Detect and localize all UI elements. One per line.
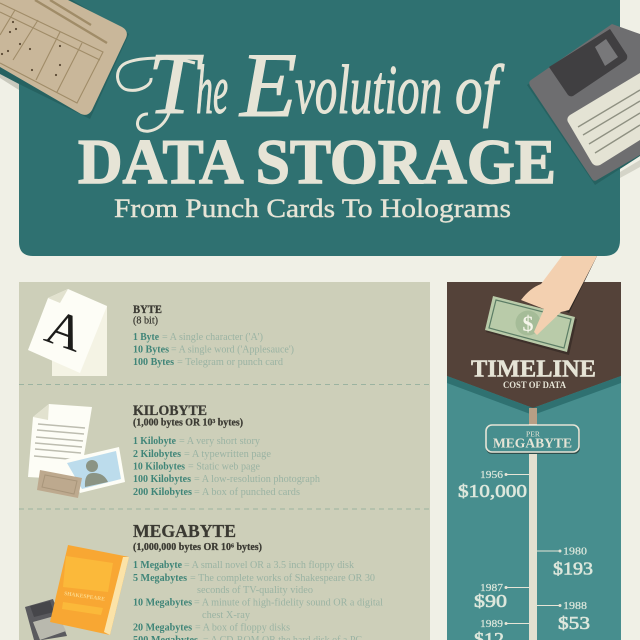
section: kilobyte: (1,000 bytes OR 10³ bytes) (133, 418, 243, 428)
timeline entry: 1980: $193 (553, 558, 593, 578)
section: kilobyte: 100 Kilobytes (133, 474, 191, 485)
section: megabyte: (1,000,000 bytes OR 10⁶ bytes) (133, 542, 262, 553)
label: per megabyte: PER (526, 430, 540, 438)
heading: timeline: TIMELINE (471, 356, 596, 382)
timeline entry: 1956: $10,000 (458, 481, 527, 501)
section: kilobyte: 2 Kilobytes (133, 449, 181, 460)
icon: letter A paper (28, 289, 107, 376)
timeline entry: 1987 (474, 582, 529, 611)
icon: small floppy disk (25, 599, 67, 640)
icon: paper, photo and card (28, 404, 125, 498)
title: The Evolution of: he (196, 52, 228, 129)
icon: hand holding banknote (485, 256, 597, 355)
section: megabyte (133, 521, 383, 640)
panel: data units (19, 282, 430, 640)
section: megabyte: 1 Megabyte (133, 560, 182, 571)
section: kilobyte: 200 Kilobytes (133, 487, 192, 498)
section: byte (133, 304, 294, 368)
section: byte: BYTE (133, 304, 162, 316)
section: byte: = Telegram or punch card (177, 357, 284, 368)
icon: punch card (0, 0, 129, 119)
panel: timeline (447, 256, 621, 640)
timeline entry: 1980: 1980 (563, 546, 588, 558)
icon: hand holding banknote: $ (522, 311, 534, 336)
section: kilobyte (133, 403, 321, 498)
section: megabyte: MEGABYTE (133, 521, 236, 541)
timeline entry: 1956: 1956 (480, 469, 504, 481)
section: megabyte: 5 Megabytes (133, 573, 187, 584)
label: per megabyte (486, 425, 580, 454)
section: kilobyte: = A typewritten page (184, 449, 271, 460)
timeline entry: 1980 (537, 546, 593, 578)
title: DATA STORAGE: DATA STORAGE (78, 127, 556, 197)
section: megabyte: = A minute of high-fidelity sound OR a digital (194, 598, 383, 608)
timeline entry: 1987: 1987 (480, 582, 504, 594)
section: kilobyte: = Static web page (188, 462, 260, 472)
icon: floppy disk (527, 24, 640, 185)
section: kilobyte: 10 Kilobytes (133, 462, 185, 472)
header banner (19, 0, 620, 256)
section: byte: = A single character ('A') (162, 332, 263, 343)
timeline entry: 1987: $90 (474, 591, 507, 611)
section: byte: (8 bit) (133, 316, 158, 326)
section: megabyte: 10 Megabytes (133, 598, 192, 608)
section: byte: = A single word ('Applesauce') (171, 344, 294, 356)
title: The Evolution of: E (238, 34, 297, 136)
timeline entry: 1988: $53 (558, 613, 590, 633)
title: The Evolution of: of (455, 52, 505, 129)
timeline entry: 1989: 1989 (480, 618, 504, 630)
icon: letter A paper: A (39, 298, 92, 363)
label: per megabyte: MEGABYTE (493, 436, 572, 450)
section: megabyte: = The complete works of Shakespeare OR 30 (190, 573, 375, 584)
timeline entry: 1988: 1988 (563, 600, 588, 612)
section: kilobyte: = A box of punched cards (194, 487, 300, 498)
icon: Shakespeare book: SHAKESPEARE (64, 591, 105, 603)
title: The Evolution of (118, 34, 505, 136)
title: The Evolution of: volution (295, 52, 442, 129)
subheading: cost of data: COST OF DATA (503, 380, 566, 390)
section: megabyte: seconds of TV-quality video (197, 585, 313, 596)
section: byte: 10 Bytes (133, 344, 169, 356)
section: kilobyte: = A very short story (179, 436, 261, 447)
section: megabyte: = A small novel OR a 3.5 inch floppy disk (184, 560, 355, 571)
subtitle: From Punch Cards To Holograms (114, 194, 511, 223)
section: byte: 100 Bytes (133, 357, 174, 368)
timeline entry: 1988 (537, 600, 590, 633)
section: megabyte: 20 Megabytes (133, 622, 192, 634)
section: kilobyte: = A low-resolution photograph (194, 474, 321, 485)
section: kilobyte: 1 Kilobyte (133, 436, 176, 447)
timeline entry: 1989 (474, 618, 529, 640)
section: kilobyte: KILOBYTE (133, 403, 207, 419)
section: megabyte: chest X-ray (202, 610, 251, 621)
section: byte: 1 Byte (133, 332, 159, 343)
timeline entry: 1956 (458, 469, 529, 501)
section: megabyte: = A box of floppy disks (195, 622, 290, 634)
title: The Evolution of: T (148, 36, 204, 133)
icon: Shakespeare book (50, 545, 129, 635)
